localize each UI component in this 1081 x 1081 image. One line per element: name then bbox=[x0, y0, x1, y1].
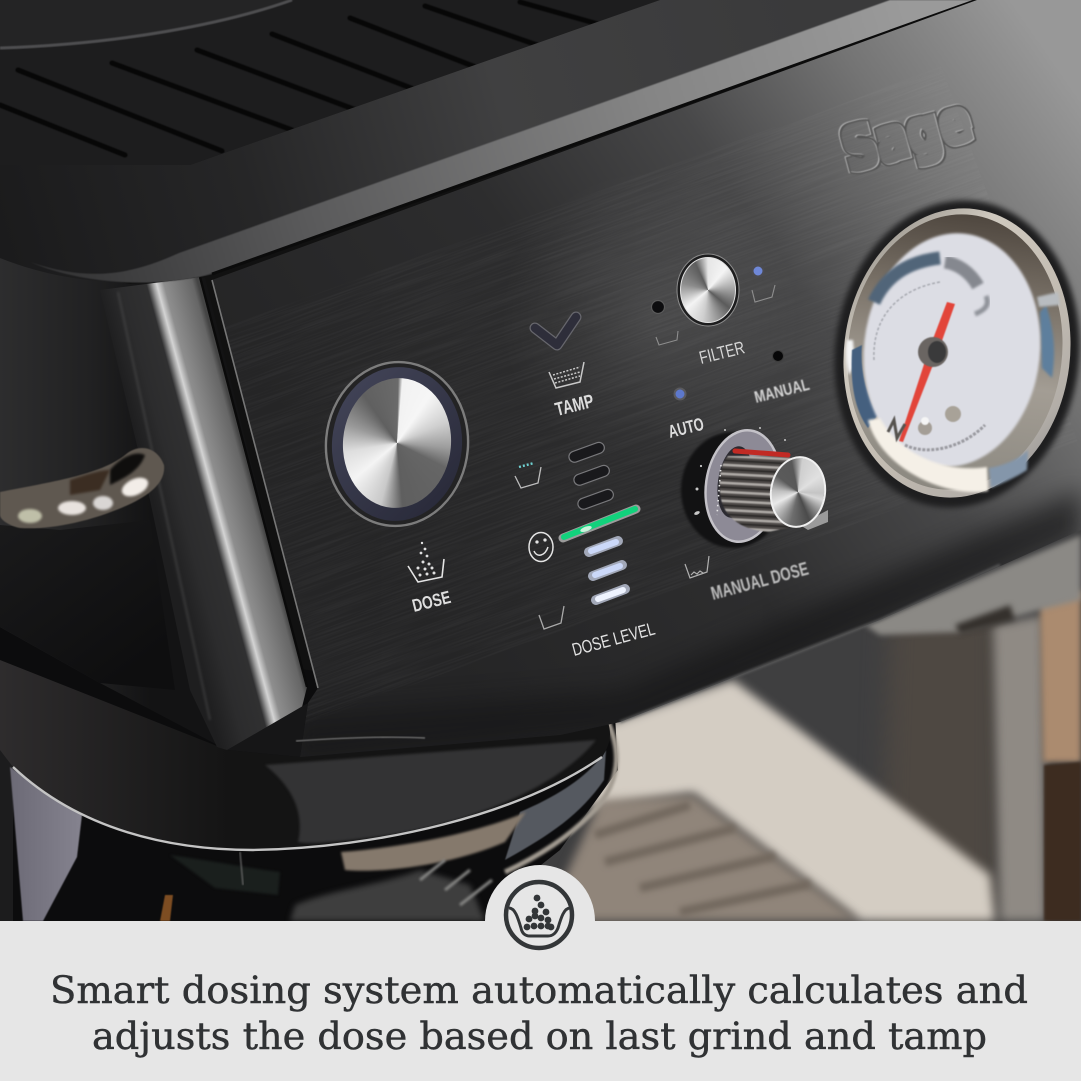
TAMP check inner bbox=[535, 317, 576, 345]
bright lower bezel reflection bbox=[868, 418, 988, 492]
top rail with bevel bbox=[0, 0, 977, 283]
label: DOSE LEVEL: DOSE LEVEL bbox=[570, 619, 657, 660]
icon: dosing basket with grounds bbox=[506, 882, 572, 948]
icon: smiley bbox=[529, 532, 553, 562]
caption text: Smart dosing system automatically calculates and bbox=[50, 969, 1028, 1012]
gauge marks bbox=[888, 406, 985, 450]
caption text bbox=[50, 969, 1028, 1058]
icon: teal-dotted cup bbox=[515, 463, 541, 488]
label: MANUAL DOSE: MANUAL DOSE bbox=[709, 559, 811, 604]
caption text: adjusts the dose based on last grind and tamp bbox=[92, 1015, 987, 1058]
black felt portafilter ring with chrome edge bbox=[0, 660, 610, 850]
dial end cap metal disc bbox=[765, 452, 831, 532]
label: FILTER: FILTER bbox=[697, 337, 747, 368]
label: MANUAL: MANUAL bbox=[752, 375, 811, 407]
silver side trim bbox=[100, 277, 307, 750]
icon: manual dose cup bbox=[685, 556, 709, 578]
dose level: green indicator bbox=[563, 509, 636, 538]
LED: auto bbox=[674, 388, 686, 400]
icon: dose basket bbox=[408, 542, 444, 582]
LED: left of filter bbox=[652, 300, 664, 314]
dose level: lit white slots bbox=[589, 541, 625, 600]
chrome lever bbox=[0, 448, 164, 528]
TAMP check indicator bbox=[535, 317, 576, 345]
DOSE button ring bbox=[319, 356, 475, 532]
blue scale arc bbox=[874, 258, 940, 302]
needle bbox=[899, 302, 955, 442]
manual dose dial bbox=[681, 425, 828, 548]
lower machine body and portafilter bbox=[0, 625, 618, 921]
LED: manual bbox=[772, 350, 784, 362]
label: TAMP: TAMP bbox=[553, 391, 596, 421]
dose level slots: upper bbox=[567, 441, 615, 511]
FILTER button metal disc bbox=[680, 257, 736, 323]
left machine body bbox=[0, 258, 307, 750]
label: DOSE: DOSE bbox=[410, 587, 453, 616]
DOSE button metal disc bbox=[338, 374, 456, 512]
top grille bbox=[0, 0, 660, 165]
pressure gauge bbox=[817, 186, 1081, 522]
LED: right of filter bbox=[752, 266, 764, 276]
label: AUTO: AUTO bbox=[666, 414, 706, 442]
icon: tamp basket bbox=[549, 362, 584, 388]
blurred kitchen background bbox=[500, 500, 1081, 921]
embossed Sage logo: Sage bbox=[836, 85, 979, 186]
icons: small filter cups bbox=[656, 285, 775, 345]
icon: empty cup bbox=[539, 606, 564, 629]
FILTER button ring bbox=[677, 254, 739, 326]
control panel face bbox=[142, 0, 1081, 770]
